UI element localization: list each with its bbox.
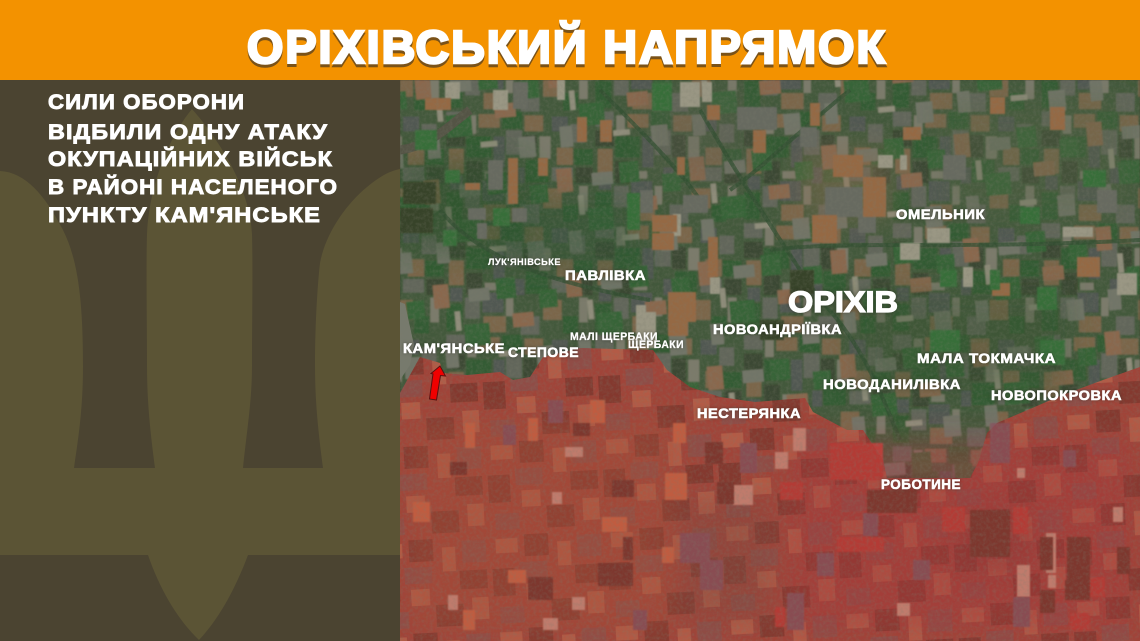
label: Новопокровка: НОВОПОКРОВКА	[991, 387, 1122, 403]
text block: attack summary: ОКУПАЦІЙНИХ ВІЙСЬК	[48, 147, 333, 171]
map: grey fields	[468, 82, 1117, 239]
map: bright green fields	[415, 83, 1106, 365]
map: orange fields in occupied area	[413, 400, 687, 630]
label: Нестерянка: НЕСТЕРЯНКА	[697, 405, 801, 421]
text block: attack summary: СИЛИ ОБОРОНИ	[48, 91, 245, 114]
label: Лук'янівське: ЛУК'ЯНІВСЬКЕ	[488, 257, 561, 268]
map: regional colour tone in occupied area	[410, 420, 1130, 630]
map: pale reservoir at left edge	[400, 302, 414, 380]
label: Щербаки: ЩЕРБАКИ	[628, 339, 684, 351]
icon: red attack arrow	[430, 366, 446, 400]
map: dark fields	[400, 182, 814, 340]
label: Мала Токмачка: МАЛА ТОКМАЧКА	[917, 350, 1056, 366]
map: grey reservoir channel	[400, 110, 470, 150]
icon: trident emblem watermark	[0, 109, 400, 640]
map: red wash over occupied area	[400, 348, 1140, 641]
text block: attack summary: ПУНКТУ КАМ'ЯНСЬКЕ	[48, 204, 321, 227]
text block: attack summary: В РАЙОНІ НАСЕЛЕНОГО	[48, 175, 338, 199]
title: ОРІХІВСЬКИЙ НАПРЯМОК	[247, 21, 887, 73]
map: dark fields in occupied area	[450, 423, 1130, 613]
title bar	[0, 0, 1140, 80]
left panel background	[0, 80, 400, 641]
map: pale fields	[445, 80, 1137, 348]
map: river and green corridors	[440, 90, 1140, 440]
label: Павлівка: ПАВЛІВКА	[565, 267, 646, 283]
label: Роботине: РОБОТИНЕ	[881, 476, 961, 492]
map: darkening wash over satellite image	[400, 80, 1140, 476]
label: Омельник: ОМЕЛЬНИК	[896, 206, 985, 222]
map labels	[403, 206, 1122, 492]
label: Новоданилівка: НОВОДАНИЛІВКА	[823, 376, 961, 392]
map: satellite view of front line	[400, 80, 1140, 641]
map: mauve fields in occupied area	[503, 400, 1076, 630]
label: Малі Щербаки: МАЛІ ЩЕРБАКИ	[570, 331, 658, 343]
map: bright red fields in occupied area	[775, 443, 1105, 630]
label: Степове: СТЕПОВЕ	[508, 344, 579, 360]
text block: attack summary	[48, 91, 338, 227]
label: Кам'янське: КАМ'ЯНСЬКЕ	[403, 340, 505, 356]
label: Новоандріївка: НОВОАНДРІЇВКА	[713, 321, 842, 337]
map: low frequency terrain tones	[400, 90, 1130, 390]
map: pale fields in occupied area	[448, 428, 1123, 630]
map: occupied area in red	[400, 348, 1140, 641]
text block: attack summary: ВІДБИЛИ ОДНУ АТАКУ	[48, 121, 328, 144]
map: orange fields	[425, 97, 1100, 336]
map: grain texture	[400, 80, 1140, 641]
label: Оріхів: ОРІХІВ	[788, 286, 898, 319]
